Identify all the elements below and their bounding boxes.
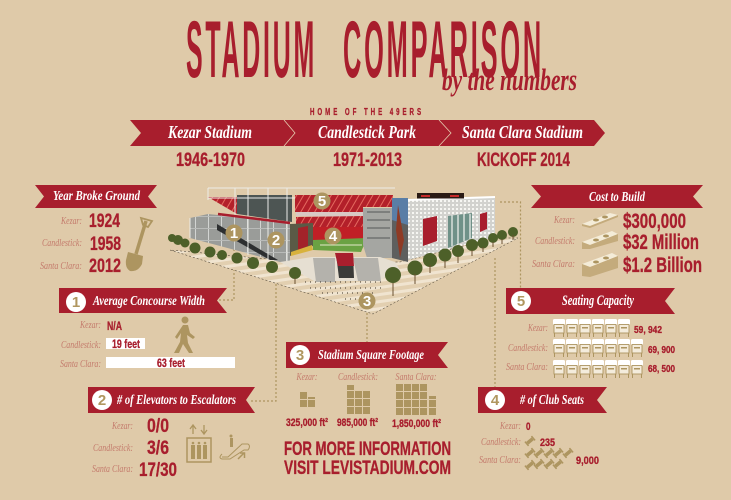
plaza ground	[170, 238, 518, 314]
labels: Kezar:	[553, 214, 575, 226]
panel: club seats	[478, 387, 607, 470]
field	[313, 238, 367, 252]
marker 4: 4	[329, 228, 338, 245]
Kezar seats	[527, 319, 662, 337]
Kezar seats: 59, 942	[634, 324, 662, 336]
call to action	[284, 438, 451, 479]
kicker: home of the 49ers: HOME OF THE 49ERS	[310, 106, 424, 118]
panel: seating capacity	[506, 288, 675, 378]
values: $32 Million	[623, 231, 699, 254]
rows: Kezar:	[79, 319, 101, 331]
rows: 2012	[89, 255, 121, 277]
rows: 19 feet	[112, 339, 140, 351]
heading banner: 1	[72, 294, 80, 311]
heading banner: 3	[296, 347, 304, 364]
panel: average concourse width	[59, 288, 235, 370]
square blocks: Kezar	[300, 392, 315, 407]
rows: 17/30	[139, 459, 177, 481]
Kezar row: Kezar:	[499, 420, 521, 432]
rows: Santa Clara:	[92, 463, 133, 475]
upper seating bowl	[295, 195, 393, 215]
icon: escalator	[220, 434, 250, 459]
rows: 3/6	[147, 437, 169, 459]
square blocks: Santa Clara	[396, 384, 436, 415]
values: $1.2 Billion	[623, 254, 702, 277]
column labels: Santa Clara:	[396, 371, 436, 383]
square footage values: 985,000 ft²	[337, 417, 378, 429]
heading banner	[506, 288, 675, 314]
square footage values: 325,000 ft²	[286, 417, 328, 429]
heading banner	[286, 342, 448, 368]
rows: Santa Clara:	[60, 358, 101, 370]
marker 3	[358, 292, 376, 310]
heading banner: # of Club Seats	[519, 392, 584, 407]
rows: Candlestick:	[93, 442, 133, 454]
rows	[40, 210, 121, 277]
Candlestick row: Candlestick:	[481, 436, 521, 448]
Santa Clara seats: 68, 500	[648, 363, 675, 375]
east tower	[408, 197, 495, 260]
marker 5	[314, 192, 330, 210]
call to action: VISIT LEVISTADIUM.COM	[284, 457, 451, 479]
icon: shovel	[126, 218, 152, 271]
heading banner: Average Concourse Width	[92, 294, 205, 309]
timeline dates: 1971-2013	[333, 149, 402, 171]
icon: Santa Clara money stack	[582, 253, 618, 277]
stadium illustration	[168, 188, 518, 314]
rows: 1958	[90, 233, 121, 255]
rows: N/A	[107, 319, 122, 333]
timeline dates: 1946-1970	[176, 149, 245, 171]
heading banner: Year Broke Ground	[53, 189, 141, 204]
central stairs	[280, 257, 400, 281]
Kezar row: 0	[526, 421, 530, 433]
marker 5: 5	[318, 193, 326, 210]
labels: Candlestick:	[535, 235, 575, 247]
Santa Clara row: Santa Clara:	[479, 454, 521, 466]
heading banner: Seating Capacity	[562, 293, 634, 309]
left glass wing	[190, 214, 290, 262]
labels	[532, 214, 575, 270]
rows: Candlestick:	[42, 237, 82, 249]
heading banner: 4	[491, 392, 500, 409]
column labels	[296, 371, 436, 383]
heading banner	[531, 185, 703, 208]
labels: Santa Clara:	[532, 258, 575, 270]
Candlestick row	[481, 436, 555, 449]
timeline banner: Santa Clara Stadium	[462, 122, 583, 142]
rows: 0/0	[147, 415, 169, 437]
marker 1	[226, 224, 242, 242]
people on plaza	[305, 282, 385, 299]
heading banner	[59, 288, 227, 313]
icon: elevator	[187, 425, 211, 462]
heading banner	[478, 387, 607, 413]
rows: Kezar:	[60, 215, 82, 227]
Santa Clara seats: Santa Clara:	[506, 361, 548, 373]
subtitle: by the numbers: by the numbers	[442, 62, 577, 97]
upper left seats	[208, 197, 237, 214]
timeline dates	[176, 149, 570, 171]
Candlestick seats: 69, 900	[648, 344, 675, 356]
timeline banner	[130, 120, 605, 146]
Santa Clara seats	[506, 360, 675, 378]
trees	[168, 227, 518, 283]
control tower section	[363, 208, 393, 258]
Candlestick row: 235	[540, 437, 555, 449]
values	[623, 210, 702, 277]
marker 2: 2	[272, 232, 280, 249]
column labels: Candlestick:	[338, 371, 378, 383]
heading banner: # of Elevators to Escalators	[116, 392, 236, 407]
timeline banner: Kezar Stadium	[167, 122, 252, 142]
Candlestick seats	[508, 339, 675, 357]
heading banner: Cost to Build	[589, 190, 646, 205]
panel: cost to build	[531, 185, 703, 277]
column labels: Kezar:	[296, 371, 318, 383]
icon: Candlestick money stack	[582, 231, 618, 249]
Candlestick seats: Candlestick:	[508, 342, 548, 354]
square blocks: Candlestick	[347, 385, 370, 414]
marker 4	[324, 228, 342, 245]
rows	[92, 415, 177, 481]
rows	[60, 319, 235, 370]
marker 1: 1	[230, 225, 238, 242]
player banner	[290, 223, 313, 256]
Kezar seats: Kezar:	[527, 322, 548, 334]
rows: 63 feet	[157, 358, 185, 370]
timeline dates: KICKOFF 2014	[477, 149, 570, 171]
heading banner: 2	[98, 392, 106, 409]
square footage values: 1,850,000 ft²	[392, 418, 441, 430]
heading banner: 5	[517, 293, 525, 310]
timeline banner: Candlestick Park	[318, 122, 416, 142]
panel: elevators to escalators	[88, 387, 255, 481]
panel: stadium square footage	[286, 342, 448, 430]
Santa Clara row	[479, 448, 599, 470]
rows: Candlestick:	[61, 339, 101, 351]
rows: 1924	[89, 210, 120, 232]
values: $300,000	[623, 210, 686, 233]
heading banner	[88, 387, 255, 413]
scoreboard	[417, 193, 464, 198]
marker 3: 3	[363, 293, 371, 310]
title: STADIUM	[186, 5, 317, 95]
call to action: FOR MORE INFORMATION	[284, 438, 451, 460]
rows: Kezar:	[111, 420, 133, 432]
square footage values	[286, 417, 441, 430]
lower seating bowl	[296, 216, 364, 240]
icon: walking person	[174, 316, 195, 353]
dotted leader lines	[217, 202, 520, 401]
Santa Clara row: 9,000	[576, 455, 599, 467]
marker 2	[268, 232, 284, 249]
rows: Santa Clara:	[40, 260, 82, 272]
panel: year broke ground	[35, 185, 157, 277]
heading banner: Stadium Square Footage	[318, 348, 424, 363]
icon: Kezar money stack	[582, 213, 618, 228]
